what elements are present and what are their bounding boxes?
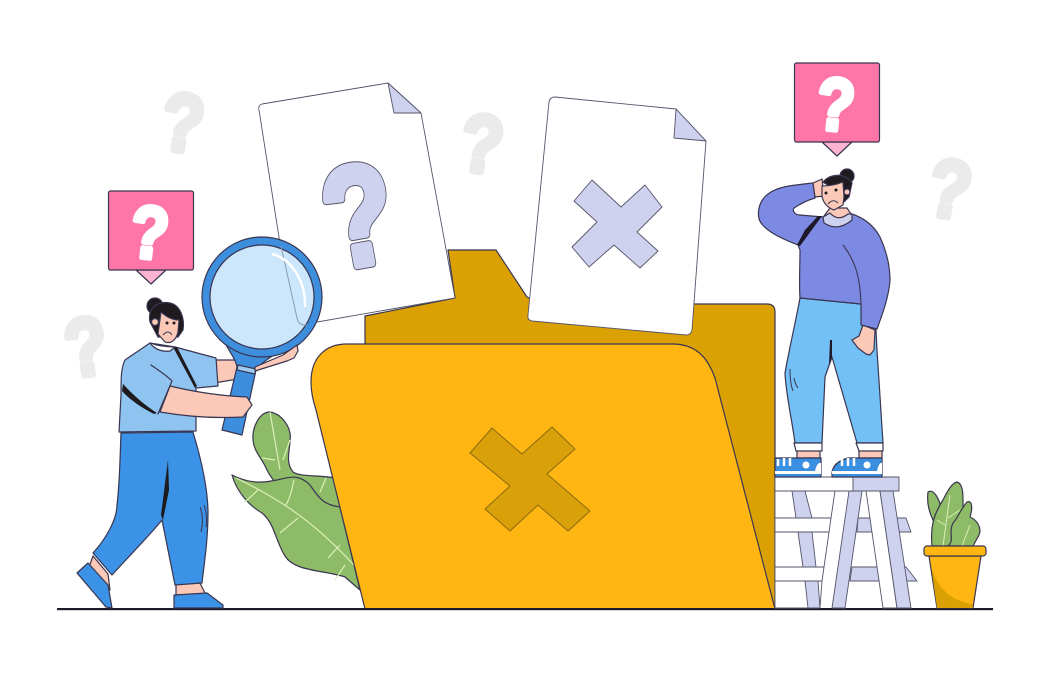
trousers bbox=[785, 298, 883, 443]
ground line bbox=[57, 608, 993, 610]
shoes bbox=[775, 450, 882, 477]
paper: question mark bbox=[259, 83, 455, 325]
faded question marks: ? bbox=[921, 141, 979, 239]
head bbox=[813, 169, 854, 210]
speech bubble left bbox=[108, 190, 194, 284]
paper: cross mark bbox=[528, 97, 706, 335]
person right bbox=[758, 169, 890, 477]
faded question marks: ? bbox=[455, 96, 509, 193]
cross on folder bbox=[470, 427, 590, 531]
legs and trousers bbox=[88, 556, 110, 590]
hand bbox=[852, 325, 875, 355]
far hand bbox=[255, 345, 298, 371]
far arm bbox=[214, 360, 240, 383]
folder back bbox=[365, 250, 775, 609]
torso and sleeve bbox=[119, 343, 218, 432]
speech bubble right bbox=[794, 62, 880, 156]
sweater bbox=[758, 183, 890, 329]
faded question marks: ? bbox=[156, 75, 210, 172]
faded question marks bbox=[59, 75, 979, 396]
paper: question mark: ? bbox=[311, 133, 407, 300]
speech bubble right: ? bbox=[812, 62, 859, 148]
faded question marks: ? bbox=[59, 299, 113, 396]
person left with magnifier bbox=[77, 237, 322, 608]
near arm bbox=[160, 386, 252, 417]
head bbox=[147, 298, 183, 343]
folder front bbox=[311, 344, 775, 609]
magnifying glass bbox=[202, 237, 322, 435]
speech bubble left: ? bbox=[126, 190, 173, 276]
potted plant bbox=[924, 482, 986, 608]
step ladder bbox=[775, 477, 917, 608]
paper: question mark: ? bbox=[311, 133, 407, 300]
leaf behind folder bbox=[232, 412, 360, 590]
